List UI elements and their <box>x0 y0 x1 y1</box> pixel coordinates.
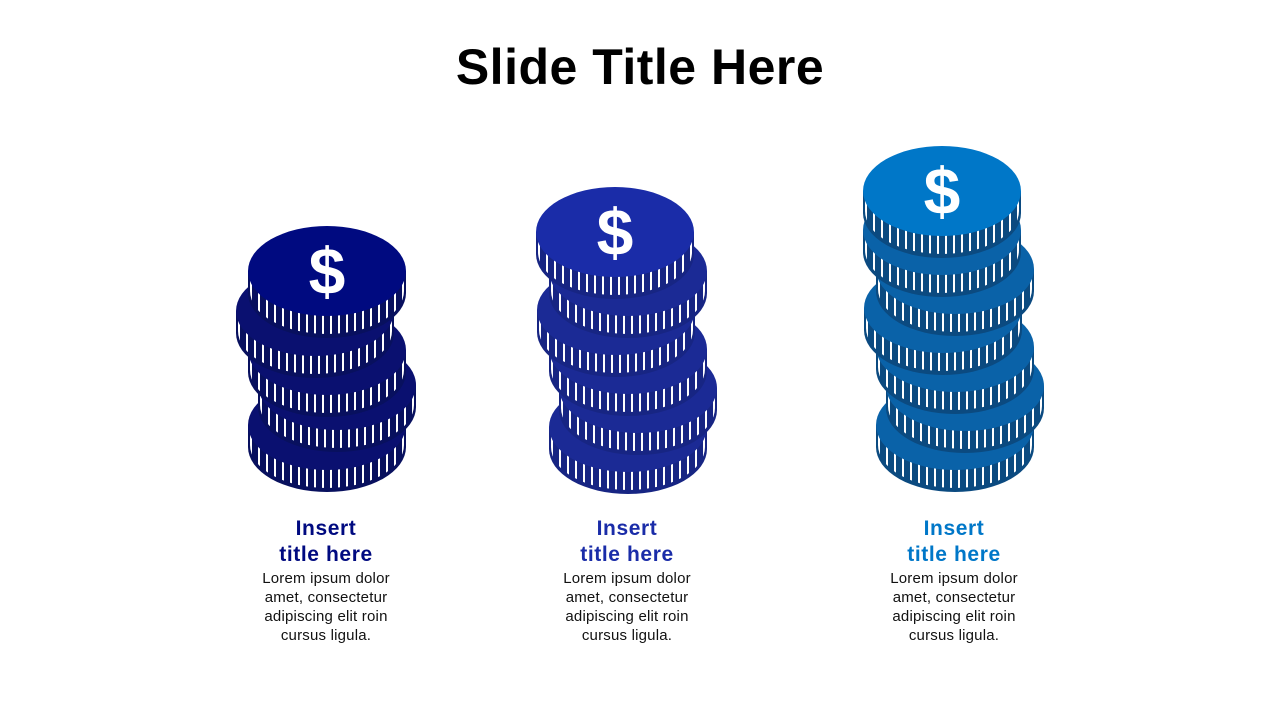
caption 1: cursus ligula. <box>281 627 371 644</box>
title: Slide Title Here <box>456 39 824 95</box>
stack 2 <box>536 187 717 494</box>
caption 3: Lorem ipsum dolor <box>890 570 1018 587</box>
icon: dollar 2: $ <box>597 195 633 269</box>
caption 2: cursus ligula. <box>582 627 672 644</box>
caption 1: title here <box>279 543 373 566</box>
caption 3: title here <box>907 543 1001 566</box>
caption 2 <box>563 517 691 644</box>
caption 2: adipiscing elit roin <box>565 608 689 625</box>
caption 2: Lorem ipsum dolor <box>563 570 691 587</box>
icon: dollar 3: $ <box>924 154 960 228</box>
caption 3 <box>890 517 1018 644</box>
caption 2: Insert <box>597 517 657 540</box>
caption 1: adipiscing elit roin <box>264 608 388 625</box>
caption 1 <box>262 517 390 644</box>
caption 2: amet, consectetur <box>566 589 688 606</box>
stack 1 <box>236 226 416 492</box>
caption 2: title here <box>580 543 674 566</box>
caption 3: adipiscing elit roin <box>892 608 1016 625</box>
stack 3 <box>863 146 1044 492</box>
caption 1: Insert <box>296 517 356 540</box>
caption 3: cursus ligula. <box>909 627 999 644</box>
icon: dollar 1: $ <box>309 234 345 308</box>
caption 1: Lorem ipsum dolor <box>262 570 390 587</box>
caption 1: amet, consectetur <box>265 589 387 606</box>
caption 3: Insert <box>924 517 984 540</box>
caption 3: amet, consectetur <box>893 589 1015 606</box>
